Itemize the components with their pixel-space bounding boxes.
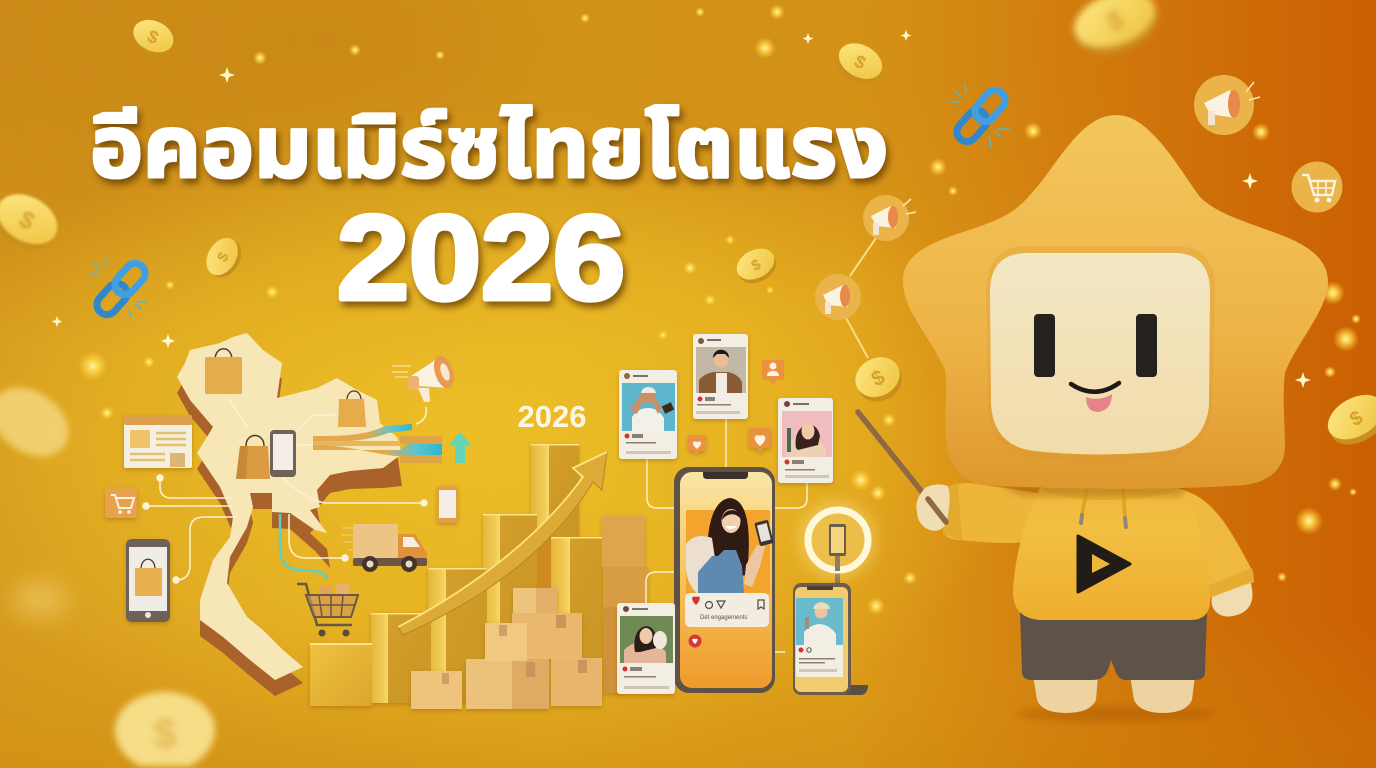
eyes xyxy=(1034,314,1157,377)
hoodie logo xyxy=(1078,536,1130,592)
legs xyxy=(1033,675,1195,713)
bar 2 xyxy=(371,613,431,703)
coin: top center right xyxy=(830,36,888,90)
ring light xyxy=(797,500,877,584)
teal line to cart xyxy=(280,514,327,580)
small phone xyxy=(793,583,868,695)
shopping bag center xyxy=(236,436,270,479)
icon: teal up arrow xyxy=(449,432,471,463)
coin: bottom blurred: $ xyxy=(153,710,177,757)
face rim xyxy=(986,246,1215,462)
red heart badge xyxy=(688,634,702,648)
coin: top center right: $ xyxy=(851,51,869,73)
ground shadow xyxy=(1015,706,1215,722)
box xyxy=(513,588,557,613)
coin: mid: $ xyxy=(749,256,764,275)
coin: right edge xyxy=(1320,386,1376,454)
main phone xyxy=(674,467,775,693)
shorts xyxy=(1020,612,1207,680)
cardboard boxes xyxy=(411,588,602,709)
connector from megaphones to coin xyxy=(846,238,876,358)
icon: megaphone xyxy=(392,353,458,402)
mouth xyxy=(1071,383,1119,392)
hand xyxy=(916,484,950,531)
box xyxy=(551,658,602,706)
small phone right xyxy=(437,486,458,523)
coin: bottom blurred xyxy=(115,692,215,766)
coin: under title left xyxy=(200,232,248,283)
box xyxy=(411,671,462,709)
bar 4 xyxy=(483,514,537,644)
shopping bag north xyxy=(205,349,242,394)
icon: user bubble xyxy=(762,360,784,385)
coin: top left: $ xyxy=(144,26,162,48)
phone photo xyxy=(686,498,774,594)
right hand xyxy=(1212,580,1252,617)
icon: coin near phone: $ xyxy=(868,365,889,391)
traffic ribbons xyxy=(313,424,442,463)
bokeh lights xyxy=(78,4,1361,615)
box xyxy=(485,623,527,661)
icon: chain link right xyxy=(950,84,1010,147)
icon: megaphone badge lower xyxy=(815,274,861,320)
bar 6 xyxy=(551,537,602,659)
bar chart of gold boxes xyxy=(310,444,648,706)
coin: left lower faint xyxy=(12,582,68,618)
coin: top right blurred xyxy=(1067,0,1165,64)
title line 2: year: 2026 xyxy=(337,191,625,325)
social card: right xyxy=(778,398,833,483)
coin: top right blurred: $ xyxy=(1103,3,1128,38)
icon: heart bubble small xyxy=(688,435,706,455)
social card: lower left xyxy=(617,603,675,694)
delivery truck xyxy=(341,524,427,572)
hoodie body xyxy=(1013,484,1210,620)
map surface xyxy=(177,333,402,680)
phone post card xyxy=(685,593,769,627)
hood collar xyxy=(1040,488,1180,500)
map connector lines xyxy=(143,399,427,583)
coin: left blurred xyxy=(0,184,66,259)
bar 1 xyxy=(310,643,372,706)
star head xyxy=(903,115,1328,489)
face xyxy=(990,253,1210,454)
social card: top center xyxy=(693,334,748,419)
box xyxy=(466,659,549,709)
mascot character xyxy=(858,115,1328,722)
bar 3 xyxy=(428,568,487,700)
phone with bag left xyxy=(126,539,170,622)
shopping bag northeast xyxy=(338,391,366,427)
social card: left xyxy=(619,370,677,459)
map extrusion xyxy=(177,349,402,696)
bar 5 back xyxy=(531,444,579,592)
coin: top left xyxy=(126,14,179,62)
icon: cart badge xyxy=(1292,162,1342,212)
coin: left faint xyxy=(0,373,82,471)
small phone photo xyxy=(796,598,843,645)
right arm xyxy=(1175,488,1254,598)
title line 1: อีคอมเมิร์ซไทยโตแรง xyxy=(90,100,888,196)
small phone post xyxy=(796,645,843,677)
shopping cart xyxy=(297,584,358,636)
title xyxy=(90,100,888,325)
icon: heart bubble large xyxy=(749,428,771,453)
sparkles xyxy=(52,30,1311,388)
growth arrow xyxy=(398,452,607,635)
stick over hand xyxy=(928,499,946,522)
icon: coin near phone xyxy=(848,350,909,409)
head shadow xyxy=(1000,484,1190,496)
icon: chain link left xyxy=(90,257,149,319)
coin: left blurred: $ xyxy=(14,205,40,236)
coin: under title left: $ xyxy=(214,249,233,265)
pointer stick xyxy=(858,412,946,522)
chart label 2026: 2026 xyxy=(518,399,586,434)
cart tile icon xyxy=(105,488,137,518)
coin: mid xyxy=(731,242,782,289)
tongue xyxy=(1086,394,1112,412)
phone center xyxy=(270,430,296,477)
icon: megaphone badge upper xyxy=(863,195,916,241)
icon: megaphone badge top right xyxy=(1194,75,1260,135)
box xyxy=(512,613,582,659)
phone post card: Dét engagements xyxy=(700,615,747,621)
drawstrings xyxy=(1081,488,1126,527)
Thailand map xyxy=(143,333,427,696)
boxes right stack xyxy=(602,516,648,693)
connector lines for social cards xyxy=(646,419,807,652)
coin: right edge: $ xyxy=(1346,407,1367,431)
browser window xyxy=(124,415,192,468)
left arm xyxy=(943,483,1045,543)
